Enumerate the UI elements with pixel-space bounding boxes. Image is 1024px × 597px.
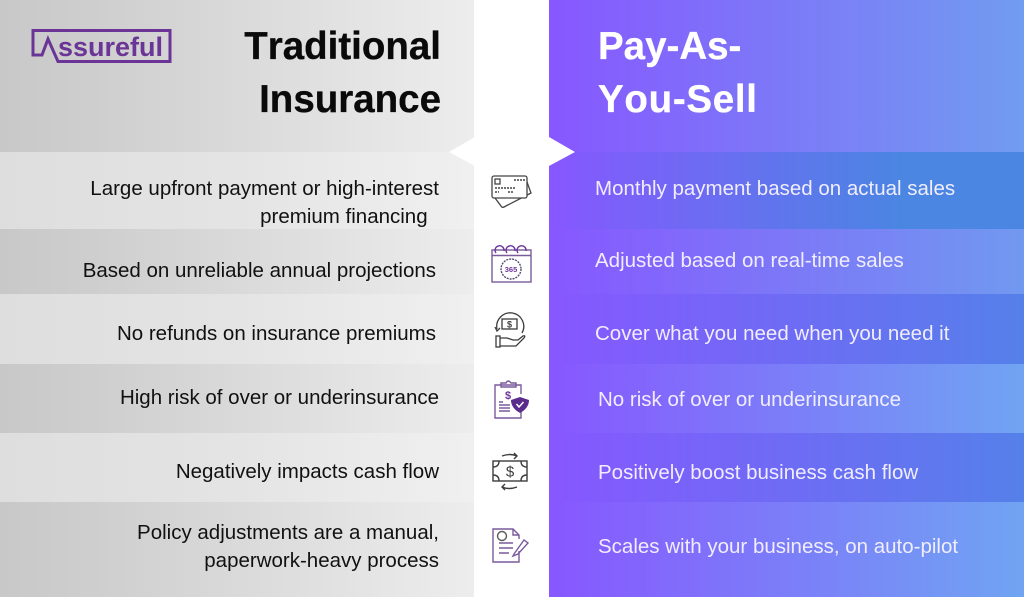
heading: Pay-As-You-Sell: You-Sell [598, 78, 758, 121]
row band 3 [0, 294, 474, 364]
row band 2 [0, 229, 474, 294]
icon: credit cards [491, 175, 532, 208]
row band 3 [549, 294, 1024, 364]
row band 4 [549, 364, 1024, 433]
icon: calendar 365 [491, 245, 532, 283]
text: traditional row 4: High risk of over or underinsurance [120, 386, 439, 409]
text: traditional row 1: premium financing [260, 205, 428, 228]
icon: calendar 365: 365 [505, 265, 517, 274]
icon: document with pen [492, 528, 529, 563]
icon: clipboard with shield [494, 380, 529, 419]
logo: Assureful [32, 29, 172, 63]
text: traditional row 6: Policy adjustments are a manual, [137, 521, 439, 544]
panel: traditional insurance background [0, 0, 474, 597]
row band 1 [0, 152, 474, 229]
heading: Traditional Insurance: Insurance [259, 78, 441, 121]
text: pay-as-you-sell row 3: Cover what you need when you need it [595, 322, 949, 345]
row band 6 [0, 502, 474, 597]
row band 4 [0, 364, 474, 433]
text: pay-as-you-sell row 4: No risk of over or underinsurance [598, 388, 901, 411]
row band 5 [0, 433, 474, 502]
text: pay-as-you-sell row 2: Adjusted based on real-time sales [595, 249, 904, 272]
row band 2 [549, 229, 1024, 294]
heading: Traditional Insurance: Traditional [244, 25, 441, 68]
arrow notch shapes [450, 137, 575, 166]
heading: Pay-As-You-Sell [598, 25, 758, 121]
icon: refund hand [494, 312, 526, 348]
icon: refund hand: $ [507, 320, 512, 330]
text: traditional row 6 [137, 521, 439, 572]
heading: Traditional Insurance [244, 25, 441, 121]
panel: pay-as-you-sell background [549, 0, 1024, 597]
icon: cash flow [492, 452, 528, 490]
icon: clipboard with shield: $ [505, 390, 511, 402]
text: traditional row 1 [90, 177, 439, 228]
text: pay-as-you-sell row 1: Monthly payment based on actual sales [595, 177, 955, 200]
text: traditional row 3: No refunds on insurance premiums [117, 322, 436, 345]
row band 5 [549, 433, 1024, 502]
text: pay-as-you-sell row 5: Positively boost business cash flow [598, 461, 918, 484]
row band 1 [549, 152, 1024, 229]
text: traditional row 1: Large upfront payment or high-interest [90, 177, 439, 200]
text: traditional row 2: Based on unreliable annual projections [83, 259, 436, 282]
text: traditional row 6: paperwork-heavy process [204, 549, 439, 572]
icon: cash flow: $ [506, 464, 515, 480]
text: pay-as-you-sell row 6: Scales with your business, on auto-pilot [598, 535, 958, 558]
heading: Pay-As-You-Sell: Pay-As- [598, 25, 741, 68]
text: traditional row 5: Negatively impacts cash flow [176, 460, 439, 483]
row band 6 [549, 502, 1024, 597]
logo: Assureful: ssureful [58, 32, 163, 62]
